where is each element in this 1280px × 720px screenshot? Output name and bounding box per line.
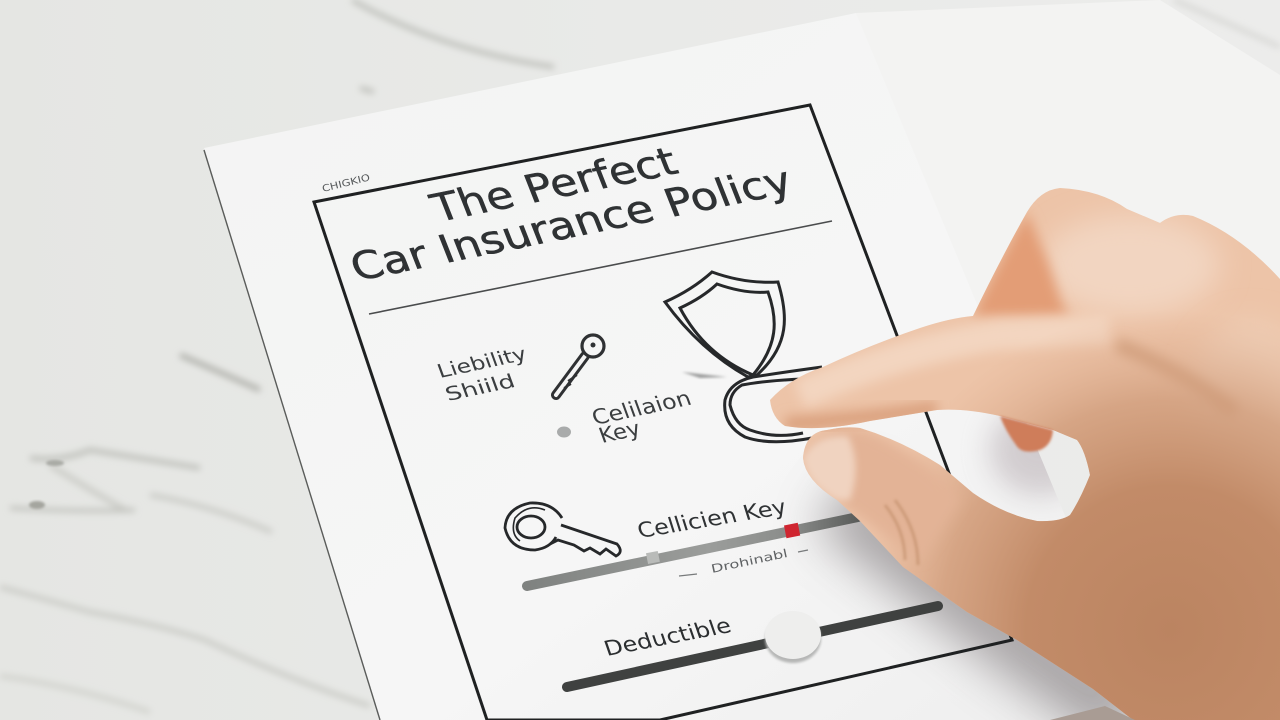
icon: shield bbox=[665, 272, 784, 377]
label: collision key 2: Cellicien Key bbox=[634, 494, 789, 543]
shield cast shadow bbox=[682, 372, 727, 378]
curled finger bbox=[1000, 416, 1053, 452]
icon: small key bbox=[556, 335, 604, 395]
right wrist highlight bbox=[1224, 327, 1280, 374]
sheet of paper bbox=[204, 13, 1150, 720]
hand shadow on paper bbox=[837, 405, 1133, 720]
label: deductible: Deductible bbox=[600, 613, 734, 661]
label: liability shield: Shiild bbox=[442, 369, 518, 406]
document frame bbox=[314, 105, 1012, 720]
hand bbox=[760, 180, 1280, 720]
upper-right sheet bbox=[856, 0, 1280, 400]
lower slider bbox=[567, 606, 938, 687]
small header label: CHIGKIO bbox=[321, 172, 371, 195]
raised finger shadow bbox=[973, 212, 1070, 316]
paper left edge shadow bbox=[204, 150, 380, 720]
grey dot bbox=[557, 426, 571, 438]
index finger underside bbox=[785, 408, 937, 424]
small slider label bbox=[679, 546, 808, 576]
thumb creases bbox=[885, 500, 918, 565]
palm and back of hand bbox=[760, 180, 1280, 720]
index finger light bbox=[800, 330, 1110, 395]
upper slider bbox=[527, 517, 858, 586]
upper hand highlight bbox=[1040, 215, 1220, 315]
knuckle shading bbox=[1117, 345, 1235, 412]
icon: loop / wrapped shield base bbox=[725, 367, 822, 442]
label: collision key: Celilaion bbox=[588, 385, 695, 430]
small slider label: Drohinabl bbox=[710, 546, 789, 576]
label: liability shield bbox=[434, 342, 530, 406]
label: collision key bbox=[588, 385, 695, 448]
title: Car Insurance Policy bbox=[344, 159, 799, 290]
darker lower hand bbox=[891, 337, 1280, 720]
shadow beneath hand at page corner bbox=[1050, 706, 1135, 720]
thumbnail bbox=[803, 436, 856, 500]
icon: large key bbox=[505, 503, 620, 556]
title rule bbox=[369, 221, 832, 314]
thumb colouring bbox=[832, 428, 928, 537]
label: collision key: Key bbox=[595, 416, 644, 448]
title: The Perfect bbox=[424, 140, 684, 232]
label: liability shield: Liebility bbox=[434, 342, 530, 383]
